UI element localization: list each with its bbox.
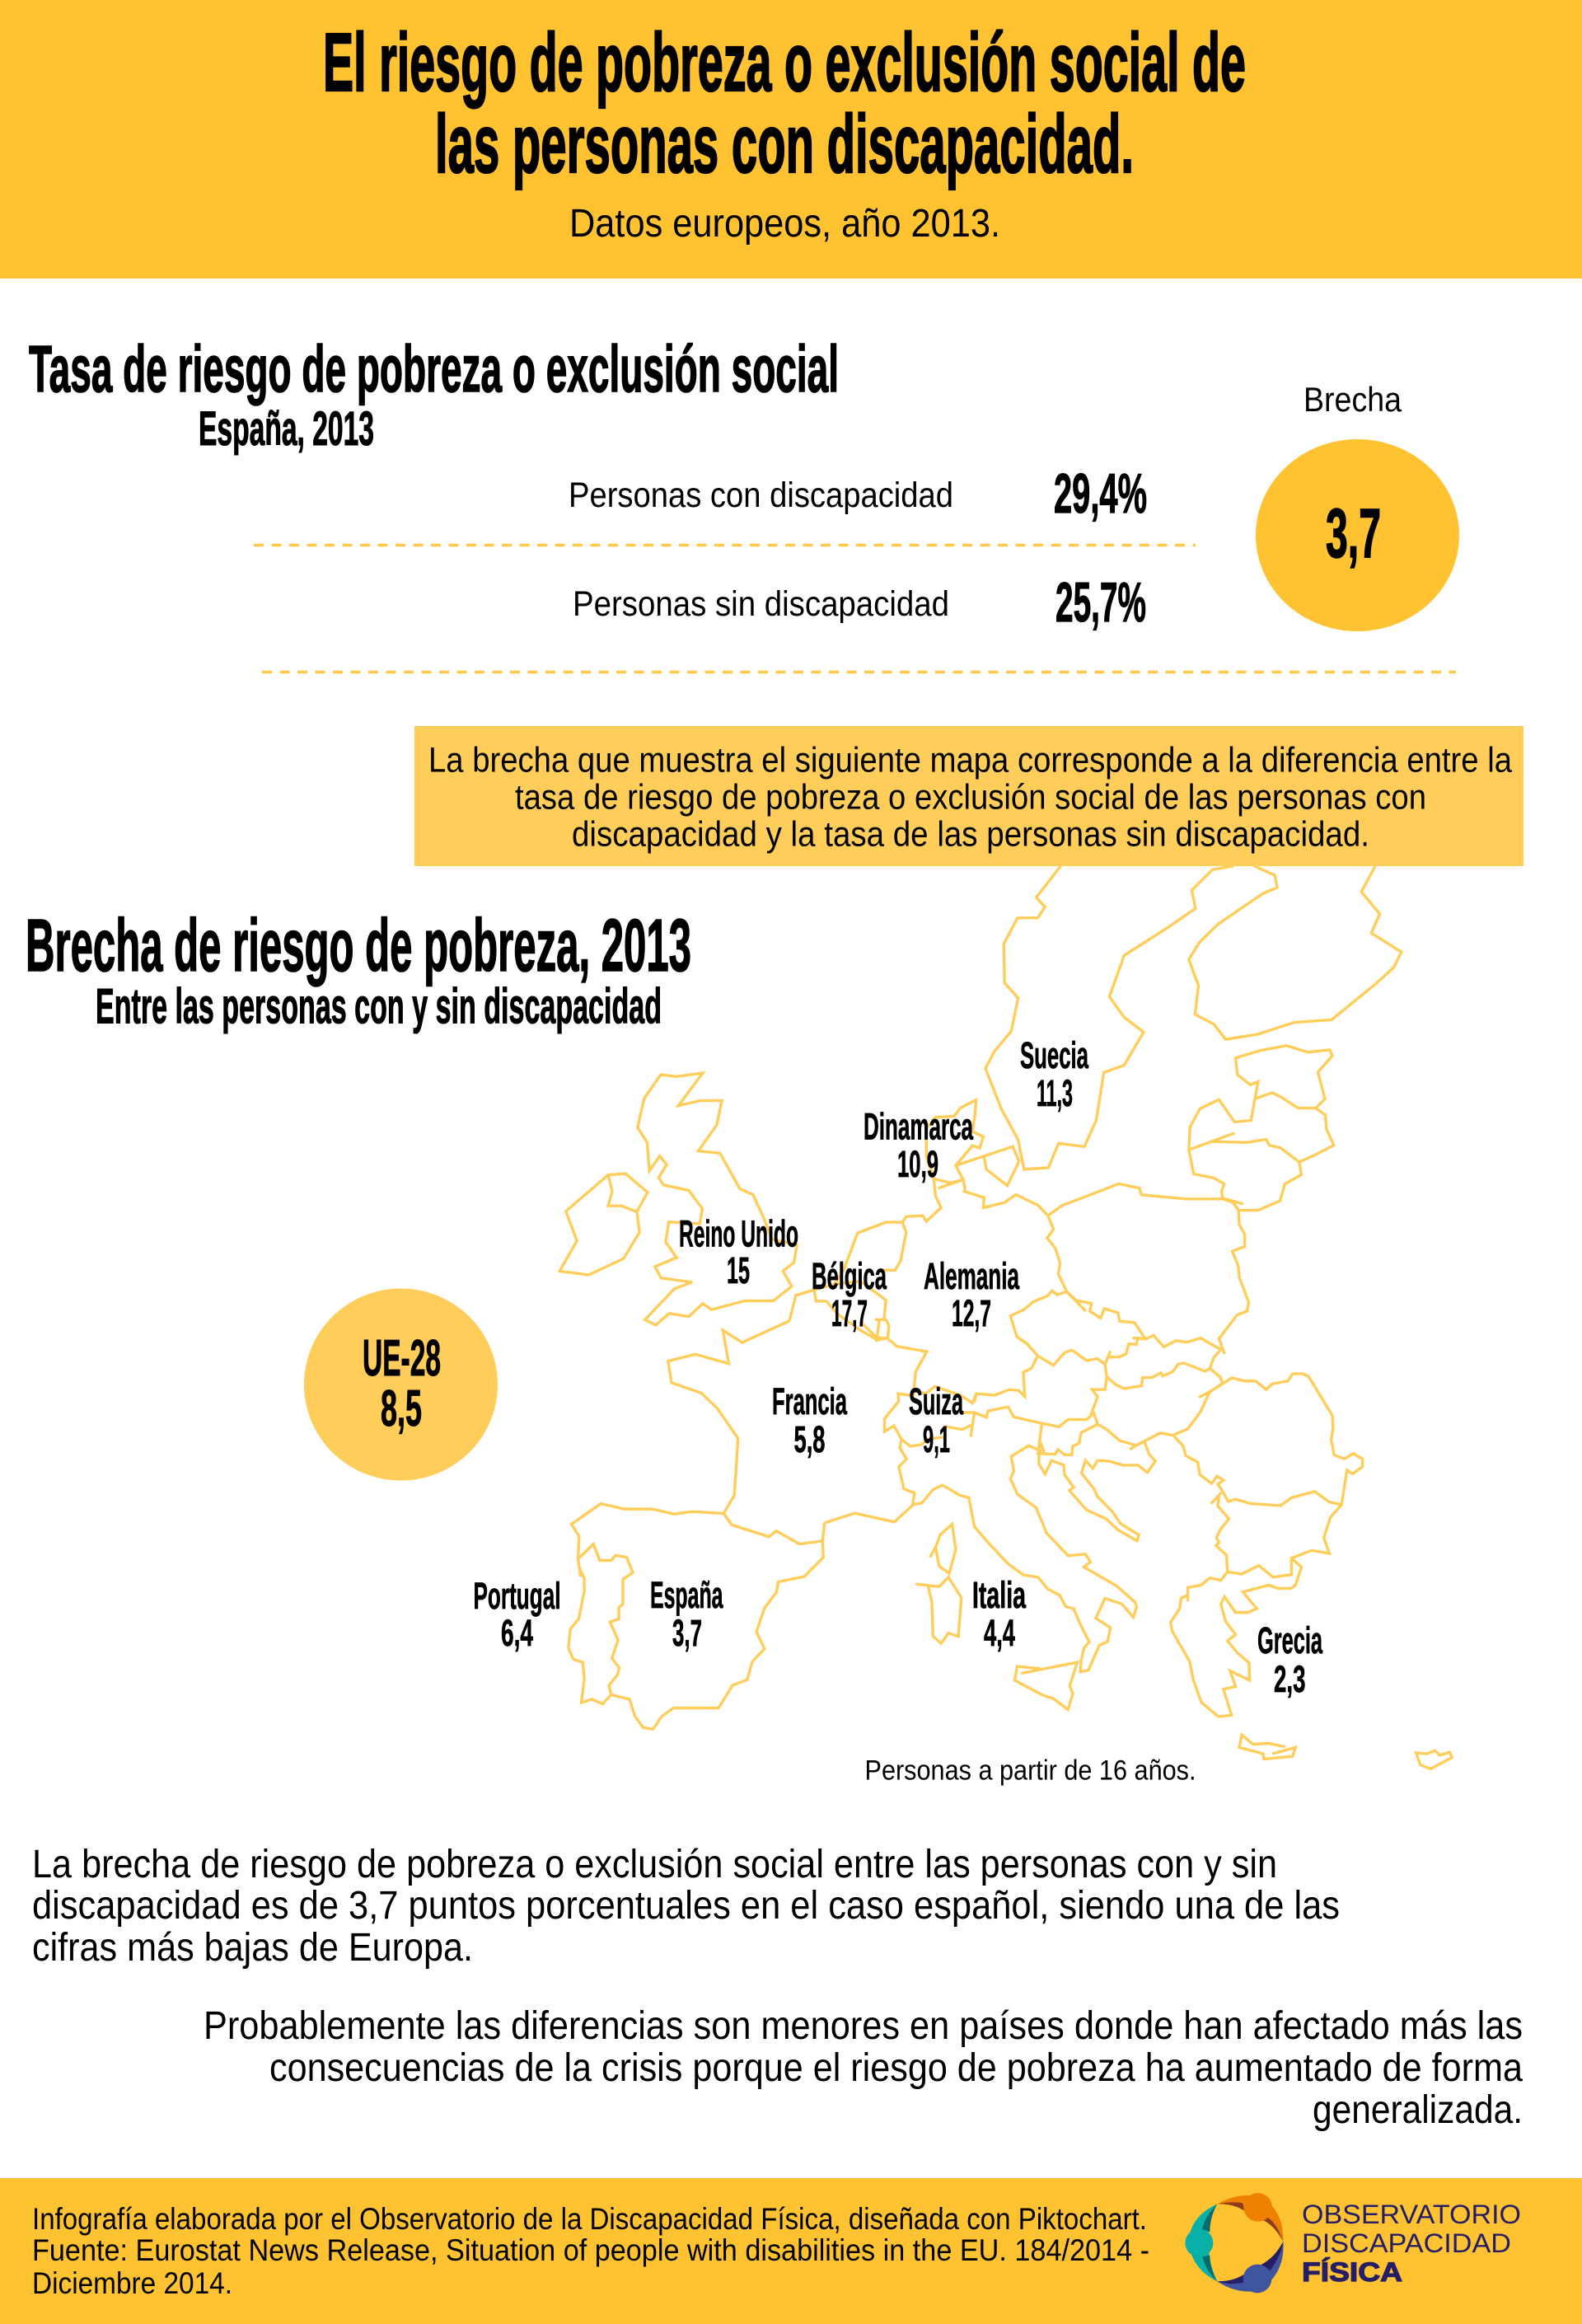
map: Italy (912, 1445, 1136, 1672)
callout: UE-28 circle: UE-28 (363, 1330, 441, 1387)
heading: brecha de riesgo (26, 905, 691, 1033)
heading: tasa de riesgo (29, 332, 839, 456)
footer credits: Infografía elaborada por el Observatorio de la Discapacidad Física, diseñada con Piktochart. (32, 2202, 1147, 2236)
callout: UE-28 circle (304, 1289, 498, 1480)
map: Sweden and Norway (985, 866, 1233, 1169)
row: personas con discapacidad: Personas con discapacidad (569, 476, 953, 515)
logo wordmark: DISCAPACIDAD (1302, 2228, 1511, 2258)
map label: España: 3,7 (672, 1612, 702, 1654)
map label: Suecia: 11,3 (1037, 1072, 1073, 1114)
heading: brecha de riesgo: Brecha de riesgo de pobreza, 2013 (26, 905, 691, 987)
heading: tasa de riesgo: Tasa de riesgo de pobreza o exclusión social (29, 332, 839, 405)
map label: Suiza: 9,1 (923, 1418, 950, 1460)
callout: brecha circle (1256, 439, 1459, 631)
row: personas con discapacidad (569, 462, 1147, 525)
map label: Reino Unido: 15 (727, 1249, 750, 1291)
map: France (668, 1290, 927, 1544)
map label: Grecia (1257, 1619, 1323, 1700)
callout: explanatory box (414, 726, 1523, 866)
map: Baltic states (1189, 1046, 1334, 1211)
logo wordmark (1302, 2200, 1521, 2287)
map label: Suecia: Suecia (1020, 1034, 1089, 1076)
heading: brecha de riesgo: Entre las personas con y sin discapacidad (96, 979, 662, 1033)
map: Germany and Denmark (902, 1100, 1048, 1222)
panel: header band (0, 0, 1582, 279)
map: Poland and Czech Republic (1010, 1183, 1249, 1366)
text block: explanation (204, 2004, 1523, 2132)
map label: Alemania: Alemania (924, 1255, 1020, 1297)
map label: Grecia: 2,3 (1274, 1658, 1305, 1700)
footer credits: Diciembre 2014. (32, 2266, 232, 2300)
text block: Spanish gap: discapacidad es de 3,7 puntos porcentuales en el caso español, siendo una de las (32, 1884, 1340, 1928)
map label: Reino Unido (679, 1213, 798, 1291)
callout: explanatory box: discapacidad y la tasa de las personas sin discapacidad. (572, 814, 1369, 854)
map label: Reino Unido: Reino Unido (679, 1213, 798, 1254)
icon: observatorio logo (1185, 2193, 1284, 2293)
label: brecha: Brecha (1304, 380, 1402, 419)
text block: Spanish gap: cifras más bajas de Europa. (32, 1926, 473, 1970)
map label: Dinamarca: 10,9 (897, 1143, 938, 1185)
text block: Spanish gap: La brecha de riesgo de pobreza o exclusión social entre las personas con y sin (32, 1843, 1277, 1886)
map label: Bélgica: 17,7 (831, 1292, 868, 1334)
map label: Portugal: 6,4 (501, 1612, 533, 1654)
map label: Suiza (909, 1380, 964, 1460)
map: Romania and Bulgaria (1173, 1374, 1363, 1577)
callout: explanatory box: tasa de riesgo de pobreza o exclusión social de las personas con (515, 778, 1426, 818)
map: Corsica, Sardinia and Sicily (915, 1524, 1077, 1709)
map: Spain and Portugal (569, 1504, 825, 1729)
row: personas sin discapacidad: Personas sin discapacidad (573, 584, 949, 624)
map label: España (650, 1574, 723, 1654)
logo wordmark: OBSERVATORIO (1302, 2200, 1521, 2229)
map label: España: España (650, 1574, 723, 1616)
map label: Portugal: Portugal (473, 1575, 560, 1617)
row: personas con discapacidad: 29,4% (1054, 462, 1147, 525)
row: personas sin discapacidad: 25,7% (1055, 571, 1146, 634)
map label: Italia: 4,4 (984, 1612, 1015, 1654)
map label: Alemania (924, 1255, 1020, 1334)
map: Croatia (1039, 1440, 1155, 1541)
map label: Suecia (1020, 1034, 1089, 1114)
map label: Dinamarca (864, 1106, 974, 1185)
map label: Bélgica: Bélgica (812, 1255, 887, 1297)
map label: Alemania: 12,7 (952, 1292, 991, 1334)
text block: explanation: generalizada. (1313, 2088, 1523, 2132)
logo wordmark: FÍSICA (1302, 2257, 1402, 2287)
map label: Grecia: Grecia (1257, 1619, 1323, 1661)
text block: Spanish gap (32, 1843, 1340, 1970)
map label: Portugal (473, 1575, 560, 1654)
map: Benelux (814, 1222, 906, 1340)
map label: Italia (972, 1574, 1027, 1654)
map label: Francia: Francia (772, 1380, 848, 1422)
note: age: Personas a partir de 16 años. (865, 1755, 1196, 1787)
map label: Suiza: Suiza (909, 1380, 964, 1422)
map: Greece, Crete and Cyprus (1171, 1558, 1452, 1769)
map label: Francia: 5,8 (794, 1418, 826, 1460)
map label: Dinamarca: Dinamarca (864, 1106, 974, 1147)
subtitle: Datos europeos, año 2013. (569, 202, 1000, 246)
callout: UE-28 circle: 8,5 (381, 1380, 422, 1437)
panel: footer (0, 2178, 1582, 2324)
footer credits: Fuente: Eurostat News Release, Situation of people with disabilities in the EU. 184/2014 - (32, 2233, 1149, 2267)
callout: brecha circle: 3,7 (1326, 494, 1381, 572)
map: Ireland (559, 1174, 648, 1275)
map of Europe (559, 866, 1452, 1769)
map label: Bélgica (812, 1255, 887, 1334)
heading: tasa de riesgo: España, 2013 (199, 402, 374, 456)
row: personas sin discapacidad (573, 571, 1146, 634)
map: Great Britain (638, 1073, 797, 1325)
title (323, 16, 1246, 190)
map: Central Europe (901, 1338, 1223, 1455)
map label: Italia: Italia (972, 1574, 1027, 1616)
map label: Francia (772, 1380, 848, 1460)
footer credits (32, 2202, 1149, 2300)
map: Finland (1189, 866, 1402, 1039)
